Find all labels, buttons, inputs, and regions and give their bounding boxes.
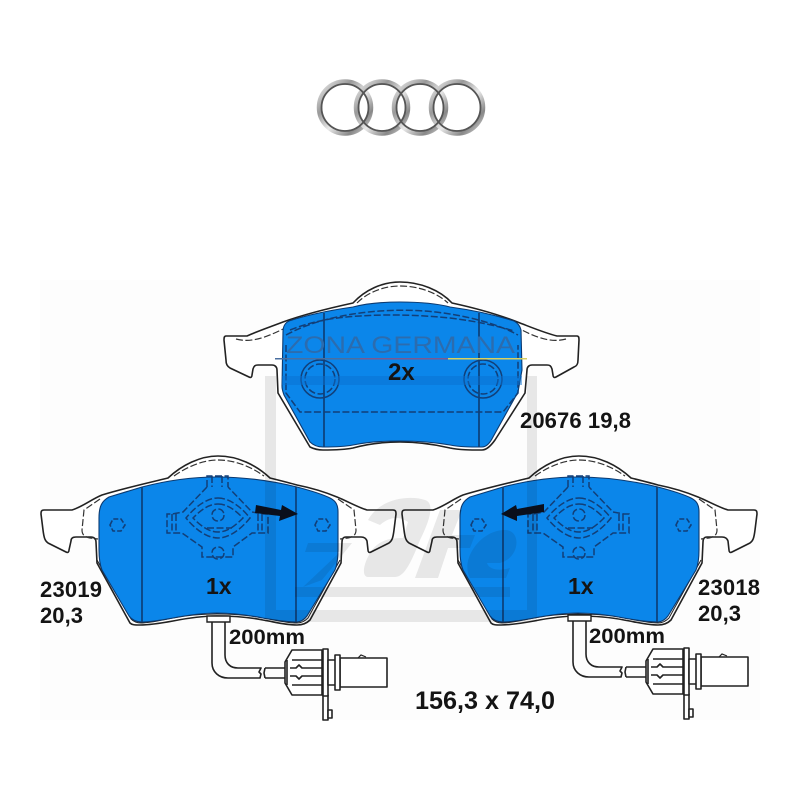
right wear sensor: [568, 615, 748, 719]
faint background panel: [40, 280, 760, 720]
label: part 23018: 23018: [698, 575, 760, 600]
blue band across top pad: [282, 376, 522, 385]
left wear sensor: [207, 616, 387, 720]
top brake pad: [224, 282, 579, 450]
label: dimensions: 156,3 x 74,0: [415, 687, 555, 715]
arrow: left pad: [255, 505, 298, 521]
label: part 23018: 20,3: [698, 601, 741, 626]
watermark logo: [265, 376, 537, 622]
arrow: right pad: [501, 504, 544, 521]
right brake pad: [402, 456, 757, 625]
label: part 23019: 23019: [40, 577, 102, 602]
label: left cable length: 200mm: [229, 626, 305, 649]
left brake pad: [41, 456, 396, 625]
label: part 23019: [40, 577, 102, 628]
label: quantity left 1x: 1x: [206, 573, 232, 599]
label: quantity 2x: 2x: [388, 359, 415, 386]
label: part 20676: 20676 19,8: [520, 408, 631, 433]
watermark text: zona germana: ZONA GERMANA: [286, 332, 515, 359]
label: part 23018: [698, 575, 760, 626]
label: quantity right 1x: 1x: [568, 573, 594, 599]
label: right cable length: 200mm: [589, 625, 665, 648]
audi logo: [320, 82, 482, 133]
label: part 23019: 20,3: [40, 603, 83, 628]
